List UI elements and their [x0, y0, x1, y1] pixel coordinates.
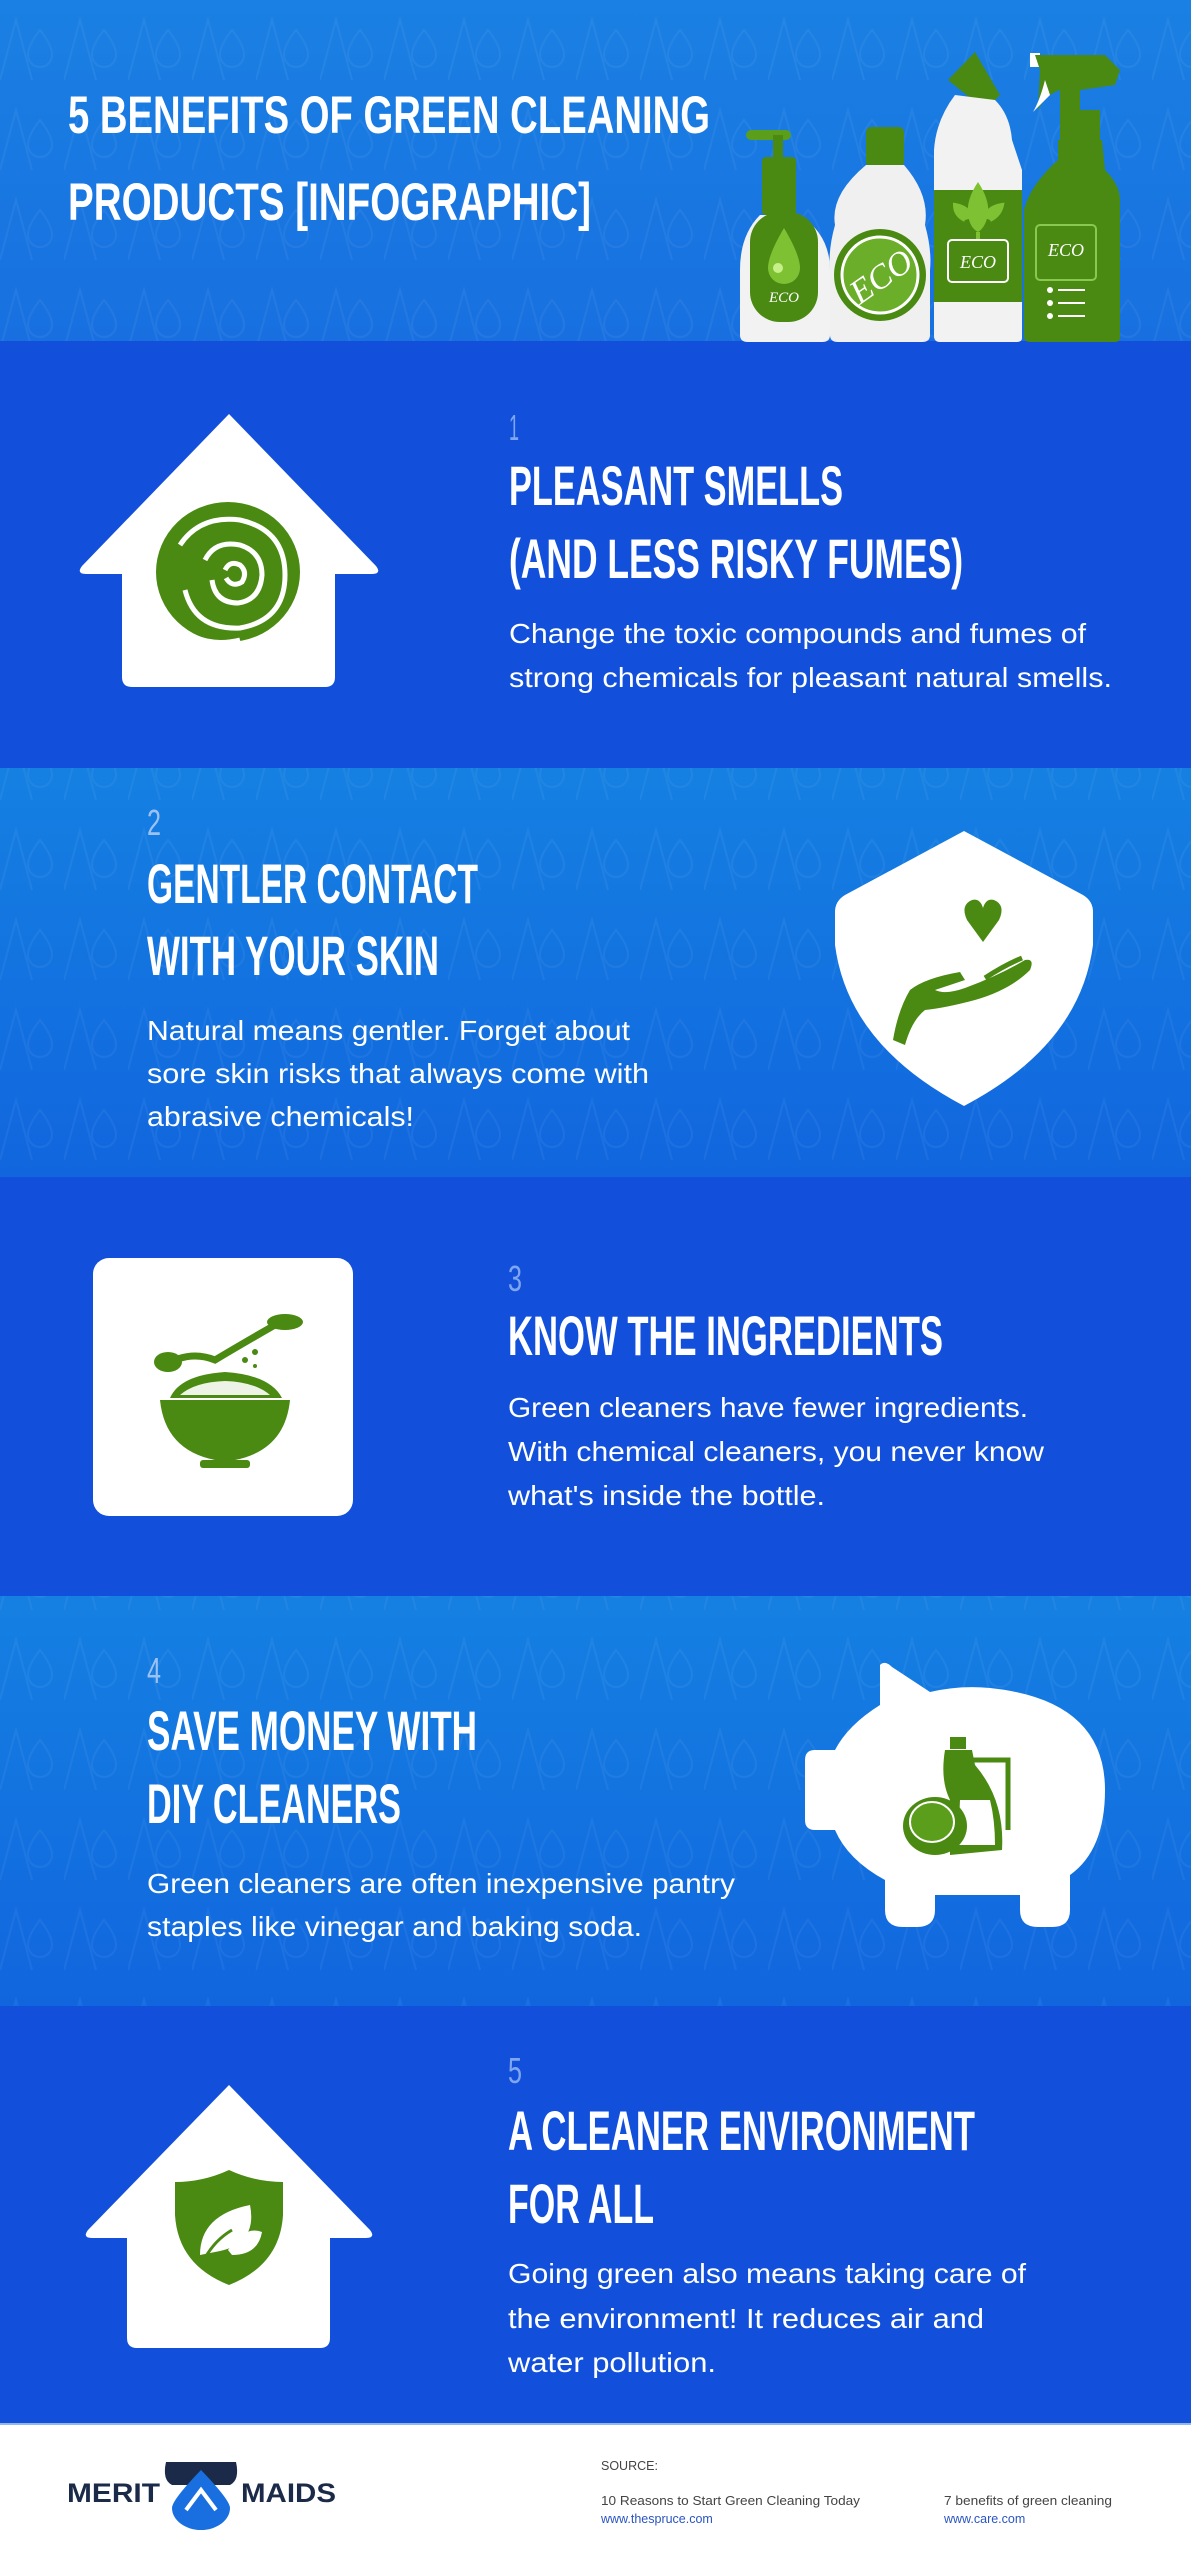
heading: GENTLER CONTACT: [147, 852, 478, 915]
bottle 4 spray: ECO: [1047, 240, 1084, 260]
body text: [147, 1868, 735, 1942]
body text: abrasive chemicals!: [147, 1101, 414, 1132]
heading: WITH YOUR SKIN: [147, 924, 439, 987]
title: [68, 86, 710, 232]
number 2: 2: [147, 802, 161, 843]
bottle 1 pump: ECO: [768, 290, 799, 306]
body text: With chemical cleaners, you never know: [508, 1436, 1045, 1467]
body text: Natural means gentler. Forget about: [147, 1015, 630, 1046]
bottle 2: [830, 127, 930, 342]
icon: house with rose: [80, 414, 378, 687]
heading: DIY CLEANERS: [147, 1772, 401, 1835]
body text: Change the toxic compounds and fumes of: [509, 618, 1086, 649]
icon: eco bottles: [740, 52, 1120, 342]
sources: www.care.com: [943, 2512, 1025, 2526]
body text: Green cleaners are often inexpensive pantry: [147, 1868, 735, 1899]
number 3: 3: [508, 1258, 522, 1299]
logo: merit maids: [67, 2462, 336, 2530]
body text: strong chemicals for pleasant natural smells.: [509, 662, 1112, 693]
icon: piggy bank with bottle and lime: [805, 1663, 1105, 1927]
heading: SAVE MONEY WITH: [147, 1699, 477, 1762]
panel: pleasant smells: [80, 407, 1112, 693]
icon: shield with hand and heart: [835, 831, 1093, 1106]
bottle 4 spray: [1024, 53, 1120, 342]
bottle 1 pump: [740, 130, 830, 342]
heading: FOR ALL: [508, 2172, 654, 2235]
body text: [507, 2258, 1026, 2378]
footer: [67, 2459, 1112, 2530]
panel: cleaner environment: [86, 2050, 1026, 2378]
number 5: 5: [508, 2050, 522, 2091]
bottle 2: ECO: [842, 242, 920, 312]
heading: [508, 2099, 975, 2235]
heading: PLEASANT SMELLS: [509, 454, 843, 517]
number 4: 4: [147, 1650, 161, 1691]
body text: the environment! It reduces air and: [508, 2303, 984, 2334]
icon: house with leaf shield: [86, 2085, 372, 2348]
sources: www.thespruce.com: [600, 2512, 713, 2526]
panel: pleasant smells: 1: [509, 407, 519, 448]
bottle 3: ECO: [959, 252, 996, 272]
heading: KNOW THE INGREDIENTS: [508, 1304, 943, 1367]
body text: Green cleaners have fewer ingredients.: [508, 1392, 1028, 1423]
body text: what's inside the bottle.: [507, 1480, 825, 1511]
sources: 10 Reasons to Start Green Cleaning Today: [601, 2494, 861, 2508]
logo: merit maids: MAIDS: [241, 2478, 336, 2508]
body text: [147, 1015, 649, 1132]
panel: gentler contact: [147, 802, 1093, 1132]
panel: save money: [147, 1650, 1105, 1942]
body text: staples like vinegar and baking soda.: [147, 1911, 642, 1942]
logo: merit maids: MERIT: [67, 2478, 161, 2508]
heading: [147, 1699, 477, 1835]
title: PRODUCTS [INFOGRAPHIC]: [68, 173, 591, 232]
body text: [507, 1392, 1045, 1511]
icon: bowl with spoon: [93, 1258, 353, 1516]
body text: water pollution.: [507, 2347, 716, 2378]
sources: [600, 2459, 1112, 2526]
panel: know the ingredients: [93, 1258, 1045, 1516]
body text: [509, 618, 1112, 693]
sources: SOURCE:: [601, 2459, 658, 2473]
body text: sore skin risks that always come with: [147, 1058, 649, 1089]
bottle 3: [934, 52, 1022, 342]
heading: [147, 852, 478, 987]
body text: Going green also means taking care of: [508, 2258, 1026, 2289]
title: 5 BENEFITS OF GREEN CLEANING: [68, 86, 710, 145]
heading: [509, 454, 963, 590]
sources: 7 benefits of green cleaning: [944, 2494, 1112, 2508]
